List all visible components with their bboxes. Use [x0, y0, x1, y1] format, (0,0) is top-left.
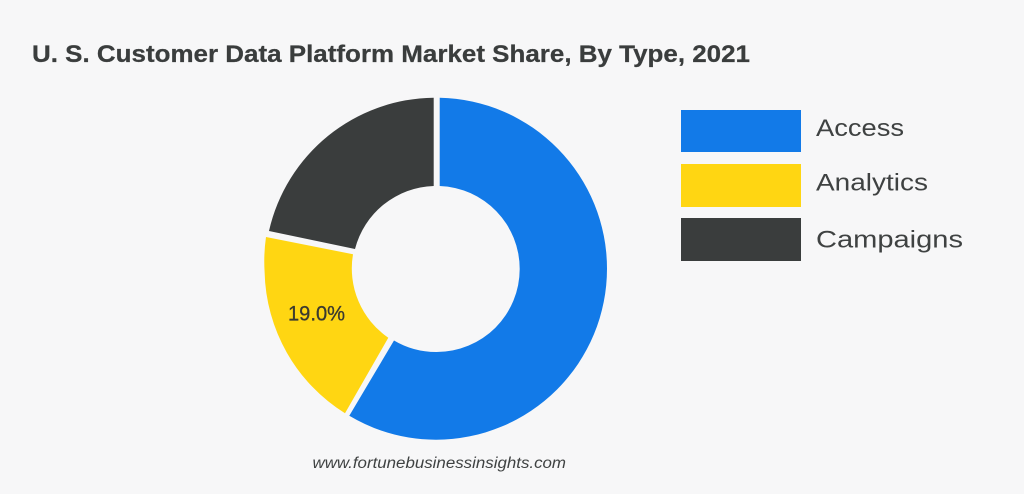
legend item: Analytics — [681, 164, 928, 207]
legend item: Campaigns: Campaigns — [816, 226, 963, 254]
legend item: Campaigns — [681, 218, 963, 261]
legend — [681, 110, 963, 261]
legend item: Access: Access — [816, 115, 904, 142]
segment: Campaigns — [269, 98, 434, 249]
legend item: Access — [681, 110, 904, 152]
segment: Access — [349, 98, 607, 440]
segment: Analytics — [264, 237, 388, 413]
donut chart — [264, 98, 607, 440]
source url: www.fortunebusinessinsights.com — [312, 455, 566, 472]
data label: 19.0%: 19.0% — [288, 302, 345, 326]
legend item: Analytics: Analytics — [816, 170, 928, 196]
title: U. S. Customer Data Platform Market Share, By Type, 2021 — [32, 41, 750, 68]
